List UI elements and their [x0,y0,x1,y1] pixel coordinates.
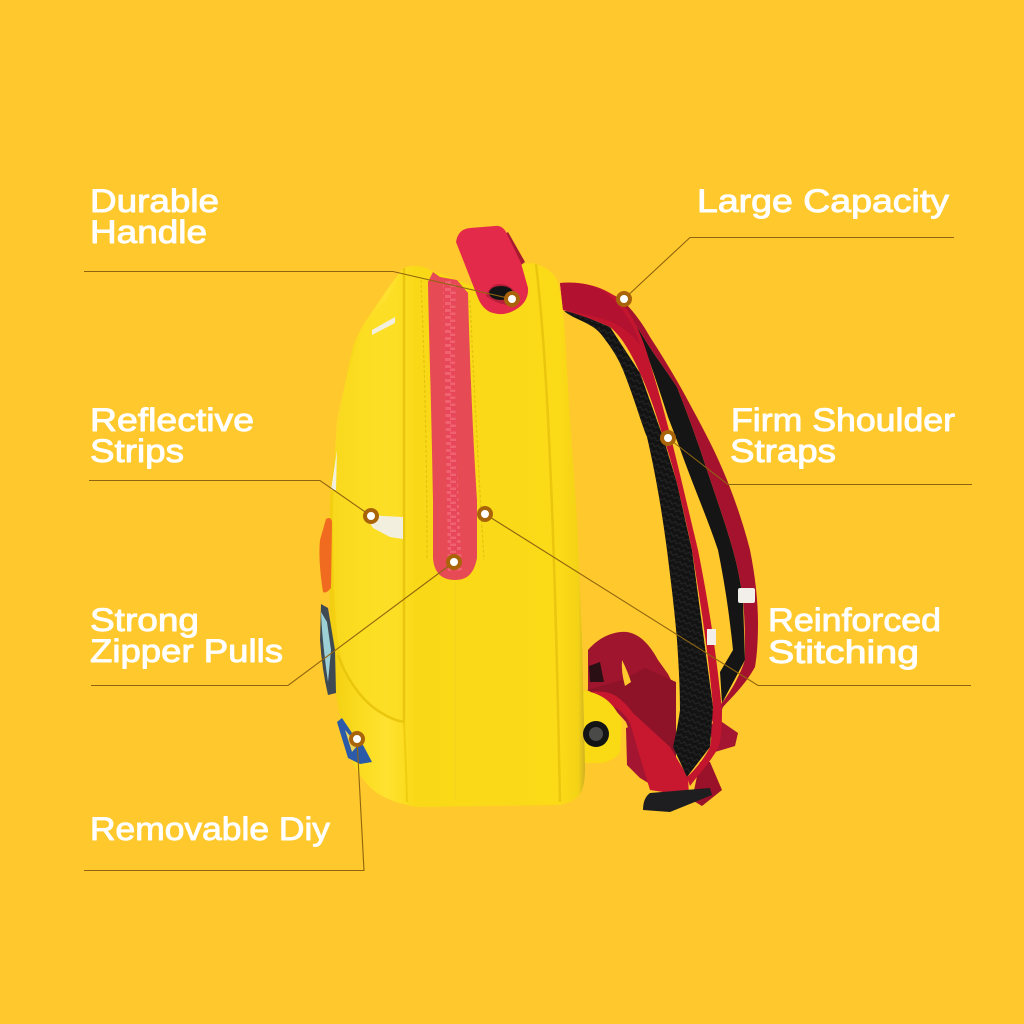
callout: strong zipper pulls: Zipper Pulls [90,633,283,669]
callout: strong zipper pulls [90,556,460,686]
callout: strong zipper pulls: Strong [90,602,199,638]
buckle [643,788,712,812]
callout: durable handle: Durable [90,183,219,219]
callout: firm shoulder straps: Firm Shoulder [731,402,955,438]
main shell [329,263,622,807]
callout: reinforced stitching [479,508,971,686]
zipper [428,272,477,580]
rivet [583,721,609,747]
callout: firm shoulder straps [662,402,972,484]
callout: large capacity [618,183,954,305]
callout: durable handle: Handle [90,214,207,250]
back shoulder strap [585,285,758,725]
reflective strips [331,317,403,539]
callout: removable diy: Removable Diy [90,811,330,847]
lower webbing straps [587,632,738,806]
callout: firm shoulder straps: Straps [730,433,836,469]
callout: durable handle [84,183,518,305]
removable decorations [319,518,372,764]
callout: reflective strips: Reflective [90,402,254,438]
callout: large capacity: Large Capacity [697,183,949,219]
callout: reflective strips [89,402,377,522]
callout: reinforced stitching: Reinforced [768,602,941,638]
front shoulder strap [560,283,722,786]
callout: removable diy [84,733,364,870]
handle [456,226,528,314]
callout: reflective strips: Strips [90,433,184,469]
backpack [319,226,758,812]
callout: reinforced stitching: Stitching [768,634,919,670]
